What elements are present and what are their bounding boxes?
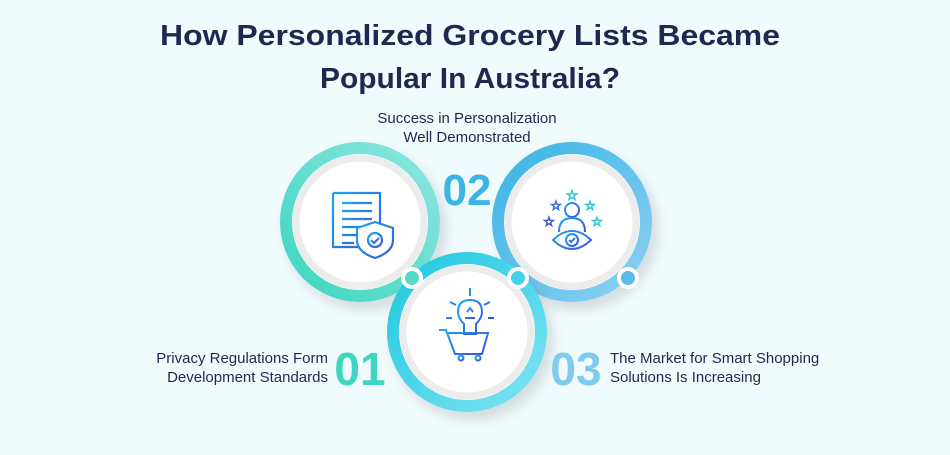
circle: middle [393,258,541,406]
text: step 02 [377,110,557,146]
icon: person with eye and stars: ☆ [566,187,578,203]
text: step 02: Well Demonstrated [403,129,531,146]
circle: left [286,148,434,296]
icon: document with shield [333,193,393,258]
title: How Personalized Grocery Lists Became [160,20,780,52]
number 03: 03 [550,343,602,395]
text: step 03: Solutions Is Increasing [610,369,761,386]
number 01: 01 [334,343,386,395]
text: step 03: The Market for Smart Shopping [610,350,819,367]
title: Popular In Australia? [320,63,620,95]
title [160,20,780,95]
icon: person with eye and stars [543,187,603,249]
icon: person with eye and stars: ☆ [550,198,562,213]
icon: person with eye and stars: ☆ [584,198,596,213]
text: step 01: Development Standards [167,369,328,386]
text: step 02: Success in Personalization [377,110,557,127]
number 02: 02 [443,166,491,215]
icon: person with eye and stars: ☆ [591,214,603,229]
icon: bulb in shopping cart [439,288,494,360]
text: step 03 [610,350,819,386]
icon: person with eye and stars: ☆ [543,214,555,229]
circle: right [498,148,646,296]
connector dots [403,269,637,287]
text: step 01: Privacy Regulations Form [156,350,328,367]
text: step 01 [156,350,328,386]
